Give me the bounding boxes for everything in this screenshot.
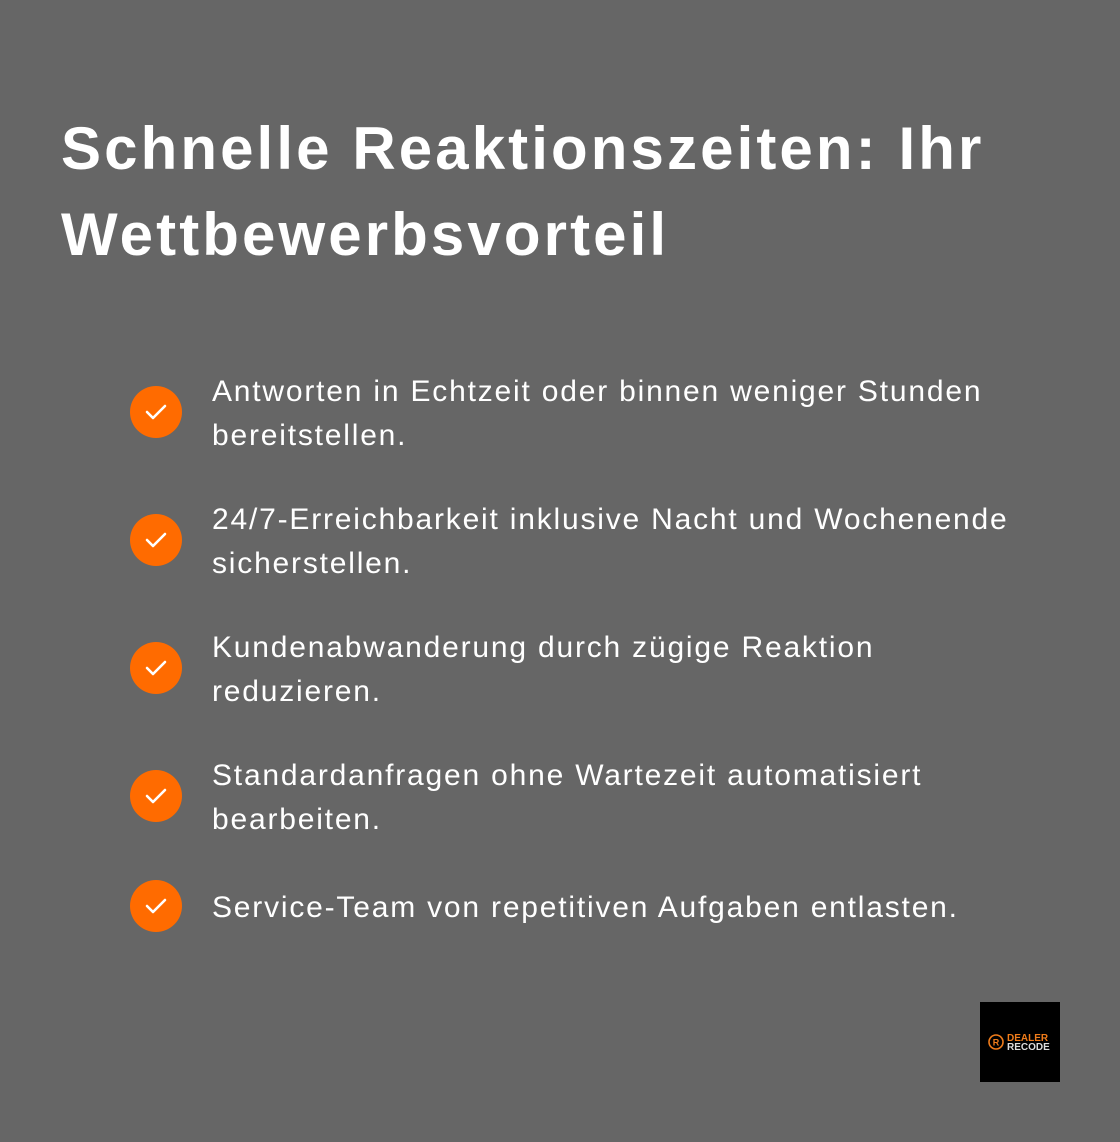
text bbox=[212, 503, 1009, 580]
text: Standardanfragen ohne Wartezeit automatisiert bbox=[212, 759, 922, 792]
item 1 bbox=[130, 375, 982, 452]
text: bereitstellen. bbox=[212, 419, 407, 452]
icon: check bbox=[130, 386, 182, 438]
text: reduzieren. bbox=[212, 675, 382, 708]
title: Wettbewerbsvorteil bbox=[61, 201, 669, 268]
title: Schnelle Reaktionszeiten: Ihr bbox=[61, 115, 984, 182]
text: 24/7-Erreichbarkeit inklusive Nacht und Wochenende bbox=[212, 503, 1009, 536]
item 3 bbox=[130, 631, 874, 708]
logo: RECODE bbox=[1007, 1042, 1050, 1053]
icon: check bbox=[130, 880, 182, 932]
item 4 bbox=[130, 759, 922, 836]
text bbox=[212, 759, 922, 836]
text: bearbeiten. bbox=[212, 803, 382, 836]
text: Kundenabwanderung durch zügige Reaktion bbox=[212, 631, 874, 664]
item 2 bbox=[130, 503, 1009, 580]
icon: check bbox=[130, 514, 182, 566]
logo: DEALER bbox=[1007, 1033, 1049, 1044]
logo bbox=[980, 1002, 1060, 1082]
text: sicherstellen. bbox=[212, 547, 412, 580]
text bbox=[212, 375, 982, 452]
icon: check bbox=[130, 642, 182, 694]
text: Antworten in Echtzeit oder binnen weniger Stunden bbox=[212, 375, 982, 408]
item 5 bbox=[130, 880, 959, 932]
text: Service-Team von repetitiven Aufgaben entlasten. bbox=[212, 891, 959, 924]
text bbox=[212, 631, 874, 708]
icon: check bbox=[130, 770, 182, 822]
logo: R bbox=[993, 1038, 1000, 1048]
title bbox=[61, 115, 984, 268]
